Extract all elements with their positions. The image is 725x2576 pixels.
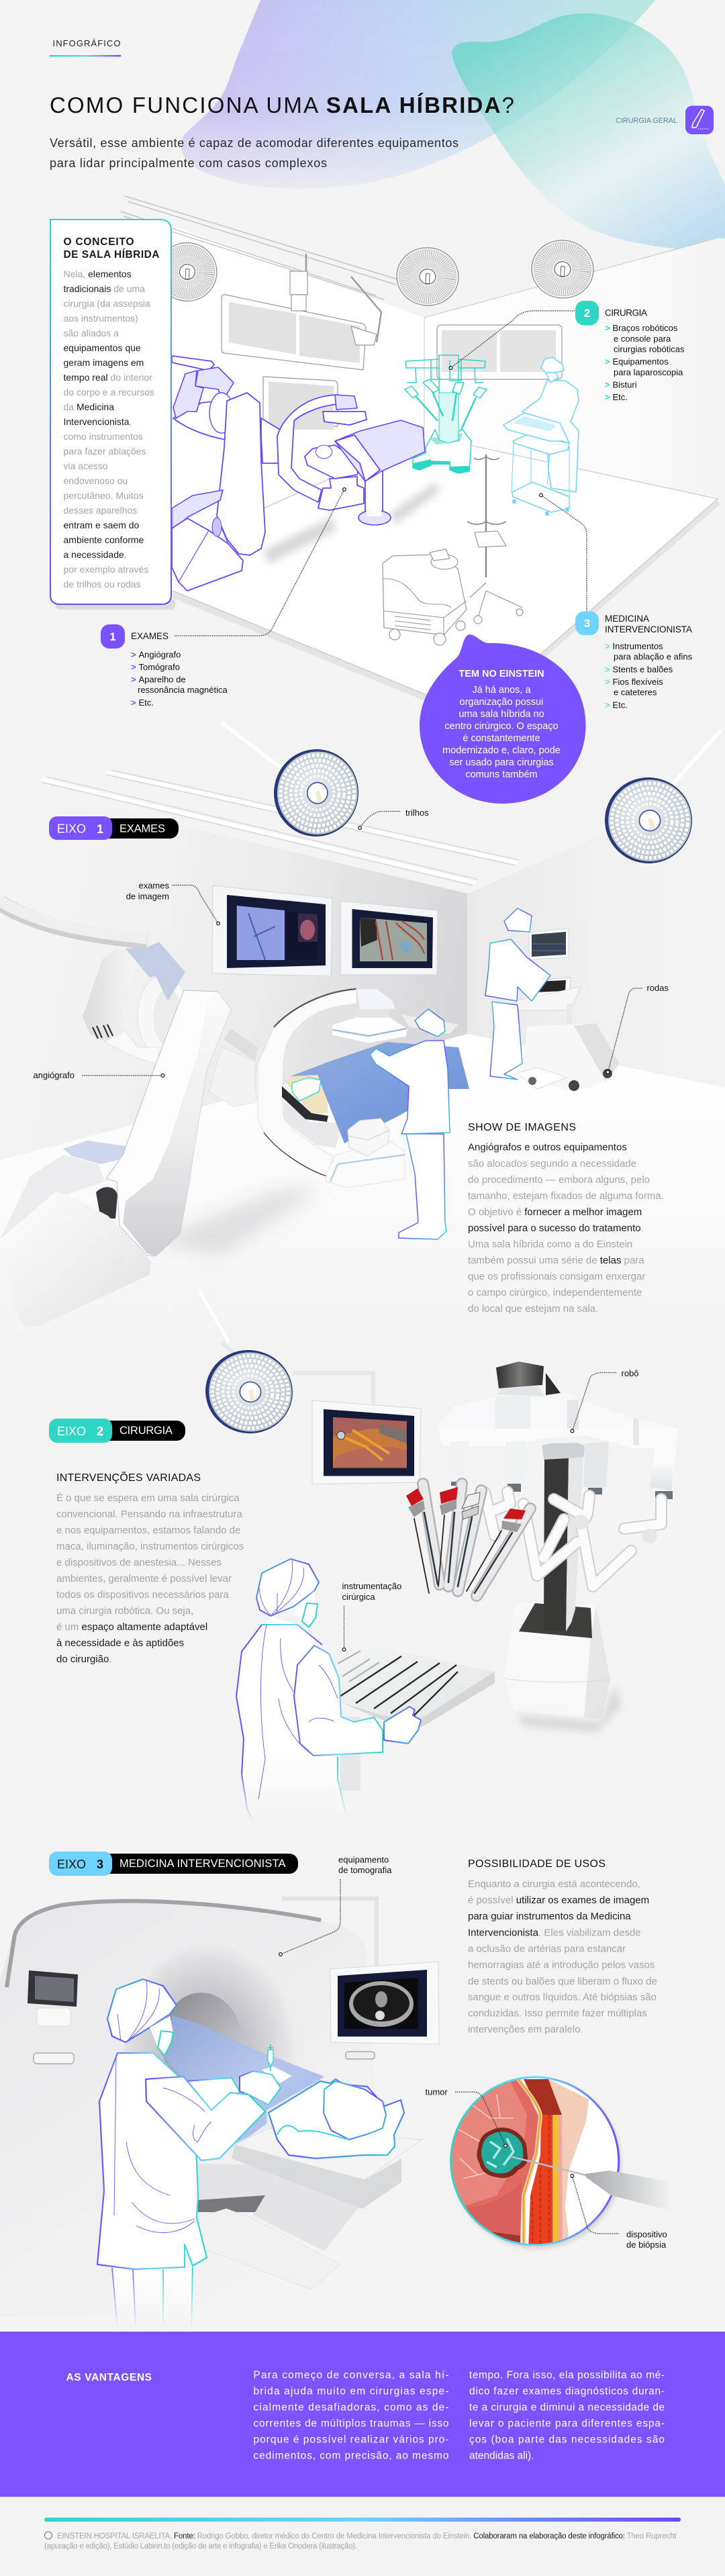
- callout 2: cirurgia: >: [605, 392, 610, 402]
- panel heading: [63, 236, 160, 260]
- table head: [305, 445, 360, 479]
- tube and head: [172, 356, 234, 440]
- credits: [44, 2532, 677, 2550]
- callout 2: cirurgia: >: [605, 380, 610, 389]
- kicker label: INFOGRÁFICO: [52, 38, 121, 48]
- text: intervenções variadas: INTERVENÇÕES VARIADAS: [56, 1470, 201, 1484]
- drape: [335, 420, 425, 481]
- text: show de imagens: possível para o sucesso do tratamento.: [468, 1223, 644, 1234]
- head unit: [438, 1362, 678, 1490]
- blue bracket: [126, 942, 185, 1001]
- label: angiógrafo: angiógrafo: [34, 1070, 75, 1080]
- column: [542, 1443, 585, 1631]
- panel text: por exemplo através: [63, 564, 148, 575]
- base wedge: [0, 1192, 151, 1327]
- axis 3 badge: [49, 1852, 298, 1876]
- CT scanner: [0, 1899, 439, 2316]
- panel text: [63, 269, 154, 589]
- instruments: [405, 379, 487, 430]
- label: rodas: [606, 983, 669, 1074]
- text: intervenções variadas: convencional. Pensando na infraestrutura: [56, 1509, 243, 1520]
- text: intervenções variadas: todos os dispositivos necessários para: [56, 1589, 229, 1601]
- callout 3: medicina intervencionista: [540, 493, 693, 710]
- upper sleeve: [186, 2078, 240, 2113]
- callout 3: medicina intervencionista: MEDICINA: [605, 614, 649, 624]
- arm mounts: [449, 1441, 673, 1499]
- callout 3: medicina intervencionista: INTERVENCIONISTA: [605, 624, 692, 634]
- text: possibilidade de usos: POSSIBILIDADE DE USOS: [468, 1858, 606, 1870]
- main arm: [106, 990, 231, 1256]
- callout bubble: tem no einstein: ser usado para cirurgias: [449, 757, 554, 768]
- ceiling lamps: [155, 237, 596, 309]
- callout 2: cirurgia: [449, 301, 685, 402]
- vantagens column 1: porque é possível realizar vários pro-: [254, 2434, 448, 2445]
- cart: [503, 413, 569, 516]
- c-arm and patient table: [209, 989, 469, 1188]
- text: possibilidade de usos: Intervencionista. Eles viabilizam desde: [468, 1927, 641, 1939]
- callout 2: cirurgia: Equipamentos: [612, 356, 669, 367]
- label: rodas: rodas: [647, 983, 669, 993]
- section 2 lamp and boom: [199, 1343, 373, 1440]
- text: intervenções variadas: É o que se espera em uma sala cirúrgica: [56, 1492, 240, 1504]
- label: dispositivo de biópsia: dispositivo: [626, 2229, 667, 2240]
- section 1 room background: [0, 722, 725, 1343]
- table: [232, 2128, 422, 2209]
- caps: [406, 1487, 526, 1532]
- scanner body: [0, 1901, 375, 2316]
- c-arm: [277, 395, 338, 502]
- callout 3: medicina intervencionista: >: [605, 665, 610, 674]
- instrument tray: [324, 1640, 495, 1791]
- text: show de imagens: são alocados segundo a necessidade: [468, 1158, 636, 1170]
- arm connector and joint: [209, 1029, 277, 1106]
- section 2 labels: [342, 1368, 639, 1651]
- text: intervenções variadas: do cirurgião.: [56, 1654, 112, 1665]
- callout 2: cirurgia: 2: [584, 307, 590, 320]
- callout 2: cirurgia: Braços robóticos: [612, 323, 678, 333]
- callout bubble: tem no einstein: TEM NO EINSTEIN: [458, 669, 544, 679]
- joint: [96, 1187, 117, 1219]
- surgeon with tray: [236, 1559, 421, 1823]
- panel text: endovenoso ou: [63, 475, 128, 486]
- vantagens column 2: dico fazer exames diagnósticos duran-: [469, 2386, 665, 2397]
- kicker label: [50, 38, 121, 56]
- label: equipamento de tomografia: equipamento: [338, 1854, 389, 1865]
- text: show de imagens: que os profissionais consigam enxergar: [468, 1271, 645, 1282]
- legs: [112, 2267, 193, 2328]
- table frame: [283, 1101, 342, 1148]
- hand: [384, 1707, 421, 1744]
- surgeon at table: [370, 1009, 450, 1239]
- text: possibilidade de usos: para guiar instrumentos da Medicina: [468, 1911, 631, 1922]
- panel text: cirurgia (da assepsia: [63, 298, 150, 309]
- vantagens column 2: atendidas ali).: [469, 2450, 534, 2461]
- text: show de imagens: tamanho, estejam fixados de alguma forma.: [468, 1190, 664, 1202]
- text: possibilidade de usos: hemorragias até a introdução pelos vasos: [468, 1959, 655, 1971]
- text: possibilidade de usos: de stents ou balões que liberam o fluxo de: [468, 1976, 657, 1987]
- callout 1: exames: ressonância magnética: [138, 685, 228, 695]
- label: tumor: [426, 2087, 507, 2147]
- callout 3: medicina intervencionista: Etc.: [612, 700, 628, 710]
- panel text: Nela, elementos: [63, 269, 132, 279]
- callout 2: cirurgia: CIRURGIA: [605, 307, 647, 318]
- near sleeve: [146, 2077, 265, 2160]
- shoulder: [0, 1155, 105, 1239]
- text: possibilidade de usos: intervenções em paralelo.: [468, 2023, 583, 2036]
- large angiograph arm: [0, 901, 231, 1327]
- label: robô: robô: [622, 1368, 639, 1378]
- text: possibilidade de usos: é possível utilizar os exames de imagem: [468, 1895, 649, 1906]
- callout 1: exames: >: [131, 650, 136, 659]
- credits: EINSTEIN HOSPITAL ISRAELITA. Fonte: Rodrigo Gobbo, diretor médico do Centro de Medicina Intervencionista do Einstein. Colaboraram na elaboração deste infográfico: Theo Ruprecht: [57, 2532, 677, 2540]
- vantagens column 2: te a cirurgia e diminui a necessidade de: [469, 2402, 665, 2413]
- text: possibilidade de usos: [468, 1858, 657, 2036]
- callout 1: exames: 1: [109, 630, 116, 643]
- header gradient blobs: [181, 0, 725, 251]
- biopsy needle: [510, 2156, 671, 2211]
- panel text: para fazer ablações: [63, 446, 146, 457]
- blue nurse with console: [503, 357, 579, 516]
- subtitle: para lidar principalmente com casos complexos: [50, 156, 327, 170]
- teal surgical robot: [405, 355, 487, 473]
- surgeon at CT: [97, 1979, 281, 2328]
- callout bubble: tem no einstein: comuns também: [465, 769, 538, 780]
- text: show de imagens: também possui uma série de telas para: [468, 1255, 644, 1266]
- callout 3: medicina intervencionista: e cateteres: [614, 687, 657, 697]
- panel: as vantagens: [0, 2332, 725, 2497]
- panel text: Intervencionista,: [63, 416, 132, 427]
- callout 3: medicina intervencionista: 3: [584, 617, 590, 630]
- sleeve: [294, 1645, 383, 1756]
- label: exames de imagem: [126, 881, 220, 925]
- panel text: tradicionais de uma: [63, 283, 145, 294]
- hood: [256, 1559, 319, 1616]
- column: [439, 393, 458, 443]
- vantagens column 2: levar o paciente para diferentes espa-: [469, 2418, 665, 2429]
- callout 1: exames: Angiógrafo: [138, 650, 181, 659]
- panel text: tempo real do interior: [63, 372, 152, 383]
- panel text: são aliados a: [63, 328, 119, 338]
- text: show de imagens: Uma sala híbrida como a do Einstein: [468, 1239, 632, 1250]
- category tag: cirurgia geral: [616, 106, 714, 134]
- callout bubble: tem no einstein: Já há anos, a: [472, 685, 531, 696]
- callout 2: cirurgia: >: [605, 356, 610, 367]
- text: possibilidade de usos: sangue e outros líquidos. Até biópsias são: [468, 1991, 657, 2003]
- label: dispositivo de biópsia: de biópsia: [626, 2240, 667, 2250]
- callout 3: medicina intervencionista: >: [605, 641, 610, 651]
- callout 3: medicina intervencionista: para ablação e afins: [614, 651, 693, 662]
- panel text: como instrumentos: [63, 431, 143, 442]
- panel text: da Medicina: [63, 401, 114, 412]
- vantagens column 1: correntes de múltiplos traumas — isso: [254, 2418, 448, 2429]
- blue drape: [161, 2015, 324, 2144]
- IV stand and gray equipment cart: [383, 455, 523, 645]
- callout 2: cirurgia: Etc.: [612, 392, 628, 402]
- text: show de imagens: O objetivo é fornecer a melhor imagem: [468, 1206, 642, 1218]
- ring: [451, 2077, 619, 2245]
- text: intervenções variadas: à necessidade e às aptidões: [56, 1637, 184, 1649]
- patient outline: [269, 2079, 404, 2158]
- panel text: percutâneo. Muitos: [63, 490, 144, 501]
- panel text: desses aparelhos: [63, 505, 137, 516]
- callout bubble: tem no einstein: é constantemente: [463, 733, 540, 744]
- axis 3 badge: EIXO: [57, 1858, 86, 1871]
- callout bubble: tem no einstein: [420, 634, 586, 804]
- lower detector: [326, 1118, 405, 1188]
- section 3 labels: [279, 1854, 667, 2250]
- hood: [107, 1979, 177, 2042]
- vantagens heading: AS VANTAGENS: [66, 2372, 152, 2383]
- mattress: [282, 1071, 328, 1122]
- wall monitors: [212, 886, 438, 976]
- axis 1 badge: [49, 816, 179, 840]
- label: exames de imagem: exames: [138, 881, 169, 890]
- wall screens: [222, 295, 562, 430]
- vantagens column 2: tempo. Fora isso, ela possibilita ao mé-: [469, 2370, 665, 2381]
- callout 3: medicina intervencionista: Stents e balões: [612, 665, 673, 674]
- text: intervenções variadas: e nos equipamentos, estamos falando de: [56, 1525, 240, 1536]
- label: exames de imagem: de imagem: [126, 892, 169, 901]
- connector: [261, 418, 280, 463]
- face mask: [150, 2016, 173, 2054]
- callout 3: medicina intervencionista: >: [605, 700, 610, 710]
- callout 1: exames: Aparelho de: [138, 674, 186, 685]
- text: show de imagens: do local que estejam na sala.: [468, 1303, 598, 1315]
- patient drape: [291, 1042, 469, 1143]
- label: robô: [571, 1368, 639, 1433]
- CT monitor: [330, 1962, 439, 2044]
- axis 1 badge: EXAMES: [119, 823, 165, 835]
- panel text: entram e saem do: [63, 520, 140, 530]
- text: intervenções variadas: e dispositivos de anestesia... Nesses: [56, 1557, 222, 1568]
- axis 2 badge: CIRURGIA: [119, 1425, 173, 1437]
- text: possibilidade de usos: conduzidas. Isso permite fazer múltiplas: [468, 2007, 647, 2019]
- label: instrumentação cirúrgica: [342, 1581, 401, 1651]
- vantagens column 1: Para começo de conversa, a sala hí-: [254, 2370, 448, 2381]
- callout 2: cirurgia: e console para: [614, 334, 671, 344]
- operating room floor: [171, 436, 720, 720]
- upper bar: [405, 355, 485, 393]
- ceiling surgical lamps: [270, 745, 696, 867]
- panel text: via acesso: [63, 461, 108, 471]
- text: intervenções variadas: uma cirurgia robótica. Ou seja,: [56, 1605, 193, 1617]
- callout 2: cirurgia: >: [605, 323, 610, 333]
- head: [83, 949, 141, 1042]
- tumor: [477, 2128, 528, 2178]
- text: intervenções variadas: maca, iluminação, instrumentos cirúrgicos: [56, 1541, 244, 1552]
- text: show de imagens: Angiógrafos e outros equipamentos: [468, 1141, 627, 1153]
- callout 1: exames: >: [131, 662, 136, 672]
- callout 1: exames: EXAMES: [131, 631, 168, 641]
- hand: [240, 2071, 281, 2105]
- panel text: ambiente conforme: [63, 534, 144, 545]
- concept panel: [50, 220, 175, 610]
- credits: (apuração e edição), Estúdio Labirin.to (edição de arte e infografia) e Erika Onodera (ilustração).: [44, 2542, 357, 2550]
- text: possibilidade de usos: Enquanto a cirurgia está acontecendo,: [468, 1878, 640, 1890]
- vertical arm: [217, 393, 265, 555]
- ceiling boom: [290, 254, 381, 345]
- callout 1: exames: Etc.: [138, 698, 154, 708]
- monitor arm: [282, 1899, 377, 1966]
- text: show de imagens: [468, 1122, 664, 1315]
- label: dispositivo de biópsia: [571, 2175, 667, 2250]
- vantagens column 1: cedimentos, com precisão, ao mesmo: [254, 2450, 448, 2461]
- text: show de imagens: SHOW DE IMAGENS: [468, 1122, 576, 1133]
- axis 3 badge: 3: [97, 1858, 103, 1871]
- panel text: equipamentos que: [63, 342, 141, 353]
- patient head outline: [292, 1078, 321, 1101]
- robot base: [413, 430, 471, 473]
- callout 1: exames: Tomógrafo: [138, 662, 180, 672]
- panel text: do corpo e a recursos: [63, 387, 154, 397]
- title: COMO FUNCIONA UMA SALA HÍBRIDA?: [50, 93, 514, 117]
- panel text: de trilhos ou rodas: [63, 579, 141, 589]
- needle guide: [262, 2044, 292, 2083]
- callout 1: exames: [101, 488, 346, 708]
- monitor: x-ray: [340, 901, 438, 975]
- base: [172, 490, 243, 591]
- callout 2: cirurgia: cirurgias robóticas: [614, 344, 685, 354]
- panel text: geram imagens em: [63, 357, 144, 368]
- top detector: [323, 395, 367, 425]
- pivot: [191, 992, 203, 1000]
- vantagens column 2: [469, 2370, 665, 2461]
- text: intervenções variadas: [56, 1470, 244, 1665]
- callout 3: medicina intervencionista: Fios flexíveis: [612, 677, 663, 687]
- purple C-arm and patient table: [172, 356, 425, 591]
- callout bubble: tem no einstein: organização possui: [460, 697, 543, 708]
- vantagens column 1: cialmente desafiadoras, como as de-: [254, 2402, 448, 2413]
- callout 2: cirurgia: para laparoscopia: [614, 367, 683, 377]
- monitor: angiography: [212, 886, 332, 976]
- label: equipamento de tomografia: [279, 1854, 392, 1956]
- nurse figure: [522, 357, 579, 492]
- axis 2 badge: 2: [97, 1425, 103, 1438]
- callout 1: exames: >: [131, 674, 136, 685]
- label: instrumentação cirúrgica: instrumentação: [342, 1581, 401, 1591]
- label: trilhos: trilhos: [405, 808, 429, 818]
- lower scanner and table support: [198, 2164, 365, 2289]
- isometric room overview: [50, 196, 725, 720]
- table pedestal: [358, 469, 391, 525]
- biopsy detail circle: [446, 2074, 671, 2252]
- c-arm ring: [258, 989, 356, 1176]
- callout 3: medicina intervencionista: >: [605, 677, 610, 687]
- axis 2 badge: [49, 1419, 185, 1443]
- subtitle: [50, 136, 458, 170]
- vantagens column 1: [254, 2370, 448, 2461]
- axis 1 badge: EIXO: [57, 822, 86, 835]
- panel text: a necessidade,: [63, 549, 127, 560]
- panel heading: DE SALA HÍBRIDA: [63, 249, 160, 260]
- section 1 labels: [34, 808, 669, 1080]
- panel heading: O CONCEITO: [63, 236, 134, 248]
- text: intervenções variadas: é um espaço altamente adaptável: [56, 1621, 207, 1633]
- footer gradient bar: [44, 2518, 681, 2522]
- surgeon standing at console: [485, 908, 550, 1080]
- da vinci style robot: [406, 1362, 678, 1732]
- overhead cable: [0, 901, 147, 941]
- category tag: cirurgia geral: CIRURGIA GERAL: [616, 117, 677, 125]
- laparoscopy monitor: [312, 1400, 421, 1484]
- subtitle: Versátil, esse ambiente é capaz de acomodar diferentes equipamentos: [50, 136, 458, 150]
- mask: [295, 1591, 318, 1627]
- callout 2: cirurgia: Bisturi: [612, 380, 637, 389]
- room walls and ceiling: [121, 196, 725, 557]
- ring behind arm: [105, 975, 189, 1065]
- axis 3 badge: MEDICINA INTERVENCIONISTA: [119, 1858, 286, 1870]
- text: intervenções variadas: ambientes, geralmente é possível levar: [56, 1573, 232, 1584]
- callout 3: medicina intervencionista: Instrumentos: [612, 641, 663, 651]
- callout bubble: tem no einstein: modernizado e, claro, pode: [442, 745, 561, 756]
- text: show de imagens: do procedimento — embora alguns, pelo: [468, 1174, 650, 1186]
- vantagens column 1: brida ajuda muito em cirurgias espe-: [254, 2386, 448, 2397]
- callout bubble: tem no einstein: centro cirúrgico. O espaço: [444, 721, 559, 732]
- gown: [97, 2053, 207, 2269]
- top detector: [332, 989, 458, 1043]
- control panel: [28, 1970, 375, 2064]
- gown: [236, 1617, 347, 1823]
- jointed arms: [485, 1492, 661, 1586]
- lower detector: [318, 477, 364, 510]
- text: possibilidade de usos: a oclusão de artérias para estancar: [468, 1943, 626, 1955]
- text: show de imagens: o campo cirúrgico, independentemente: [468, 1287, 642, 1298]
- vantagens column 2: ços (boa parte das necessidades são: [469, 2434, 665, 2445]
- callout 1: exames: >: [131, 698, 136, 708]
- axis 1 badge: 1: [97, 822, 103, 836]
- panel text: aos instrumentos): [63, 313, 138, 324]
- callout bubble: tem no einstein: uma sala híbrida no: [458, 709, 544, 720]
- axis 2 badge: EIXO: [57, 1425, 86, 1438]
- label: tumor: tumor: [426, 2087, 448, 2097]
- label: equipamento de tomografia: de tomografia: [338, 1865, 392, 1875]
- robot base: [504, 1603, 621, 1732]
- rolling console and machine: [517, 923, 620, 1092]
- label: instrumentação cirúrgica: cirúrgica: [342, 1592, 375, 1602]
- label: angiógrafo: [34, 1070, 164, 1080]
- label: trilhos: [358, 808, 429, 829]
- tissue layers: [452, 2079, 618, 2244]
- instruments: [414, 1484, 530, 1596]
